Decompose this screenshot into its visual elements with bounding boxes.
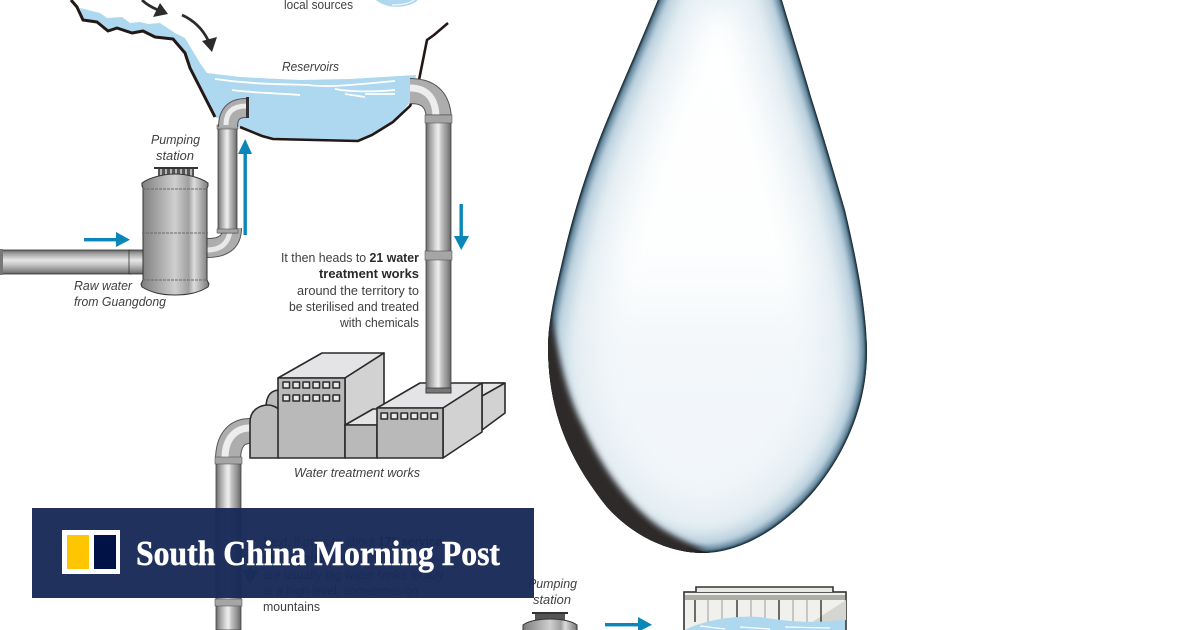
label: Pumping station: station bbox=[156, 148, 194, 163]
text: service reservoirs description bbox=[263, 534, 444, 614]
text: treatment works description: treatment works bbox=[319, 266, 419, 281]
label: Pumping station 2 bbox=[528, 576, 578, 607]
text: treatment works description: It then heads to 21 water bbox=[281, 250, 419, 265]
label: Raw water from Guangdong bbox=[74, 278, 167, 309]
text: treatment works description: around the territory to bbox=[297, 283, 419, 298]
arrow: upward flow bbox=[238, 139, 252, 235]
service reservoir tank bbox=[684, 587, 846, 630]
curved arrow: rain run-off 1 bbox=[142, 0, 168, 17]
pipe: treatment works to service reservoirs bbox=[215, 428, 250, 630]
label: Pumping station bbox=[151, 132, 201, 163]
text: service reservoirs description: are usually big water tanks locally bbox=[263, 567, 444, 582]
text: treatment works description: be sterilised and treated bbox=[289, 299, 419, 314]
logo bbox=[62, 530, 120, 574]
text: service reservoirs description: mountains bbox=[263, 599, 320, 614]
pumping station tank bbox=[141, 167, 209, 295]
label: Raw water from Guangdong: from Guangdong bbox=[74, 294, 167, 309]
arrow: flow to service reservoirs bbox=[242, 540, 258, 585]
arrow: to service reservoir bbox=[605, 617, 652, 630]
label: Pumping station 2: Pumping bbox=[528, 576, 578, 591]
arrow: downward flow bbox=[454, 204, 469, 250]
pumping station tank 2 bbox=[523, 612, 577, 630]
label: Pumping station: Pumping bbox=[151, 132, 201, 147]
curved arrow: rain run-off 2 bbox=[182, 15, 217, 52]
banner: South China Morning Post bbox=[32, 508, 534, 598]
text: treatment works description bbox=[281, 250, 419, 330]
pipe: pumping station to reservoir bbox=[207, 97, 249, 250]
label: Pumping station 2: station bbox=[533, 592, 571, 607]
text: treatment works description: with chemicals bbox=[339, 315, 419, 330]
text: service reservoirs description: reservoirs, which bbox=[263, 550, 370, 565]
pipe: reservoir to treatment works bbox=[410, 88, 452, 393]
label: Water treatment works: Water treatment works bbox=[294, 465, 420, 480]
water droplet bbox=[540, 0, 880, 565]
text: service reservoirs description: at a high level, sometimes on bbox=[263, 583, 418, 598]
wordmark: South China Morning Post bbox=[136, 534, 500, 573]
label: Raw water from Guangdong: Raw water bbox=[74, 278, 133, 293]
water treatment works building bbox=[250, 353, 505, 458]
reservoir landscape bbox=[71, 0, 448, 141]
label: Reservoirs: Reservoirs bbox=[282, 59, 339, 74]
text: service reservoirs description: Next, it goes to about 170 service bbox=[263, 534, 442, 549]
local sources circle bbox=[376, 0, 418, 7]
arrow: raw water flow bbox=[84, 232, 130, 247]
pipe: raw water horizontal bbox=[0, 249, 143, 275]
